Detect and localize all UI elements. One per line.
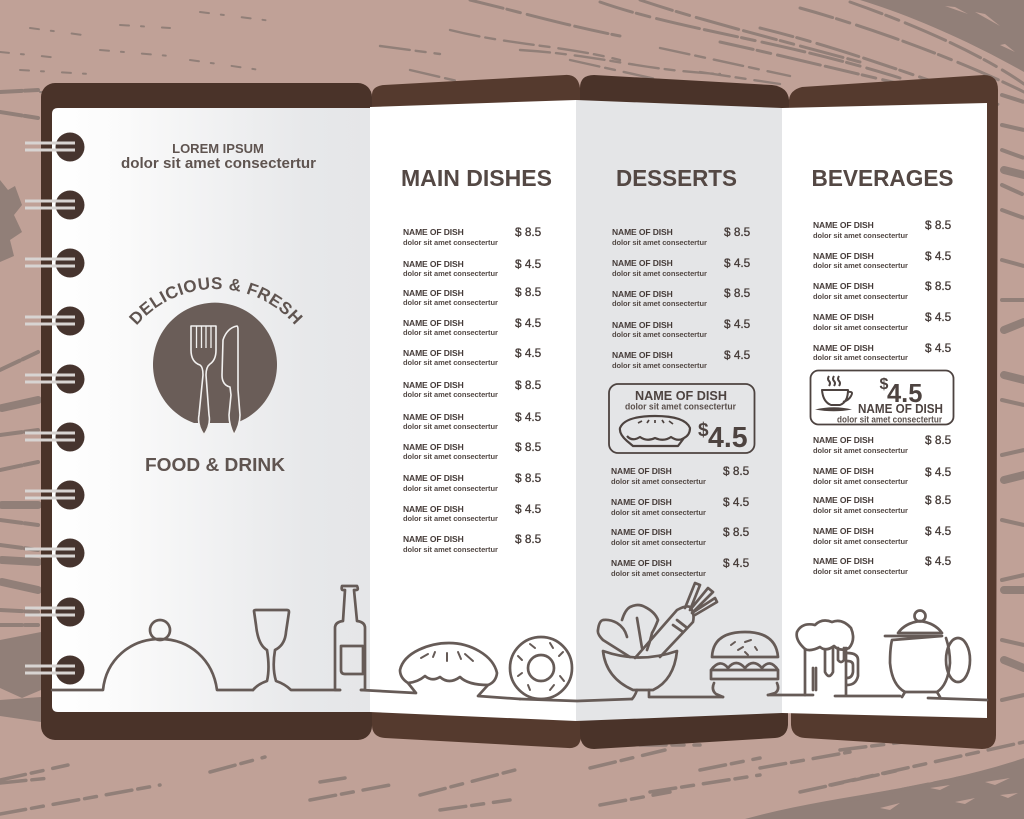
- list: main dishes: $ 4.5: [515, 410, 542, 424]
- list: main dishes: $ 4.5: [515, 502, 542, 516]
- panel 2 cover: [372, 75, 581, 748]
- list: main dishes: dolor sit amet consectertur: [403, 269, 498, 278]
- line: centre fold: [520, 699, 632, 701]
- menu pages: [52, 100, 987, 721]
- list: beverages: NAME OF DISH: [813, 251, 874, 261]
- list: main dishes: dolor sit amet consectertur: [403, 238, 498, 247]
- list: desserts: NAME OF DISH: [611, 466, 672, 476]
- callout: beverage special: NAME OF DISH: [858, 402, 943, 416]
- panel 1 cover: [41, 83, 372, 740]
- list: desserts: dolor sit amet consectertur: [612, 269, 707, 278]
- list: main dishes: NAME OF DISH: [403, 504, 464, 514]
- list: beverages: $ 8.5: [925, 433, 952, 447]
- page: main dishes: [370, 100, 576, 721]
- icon: burger: [711, 632, 813, 697]
- list: desserts: dolor sit amet consectertur: [611, 477, 706, 486]
- list: beverages: dolor sit amet consectertur: [813, 292, 908, 301]
- list: desserts: NAME OF DISH: [611, 527, 672, 537]
- icon: pie: [361, 643, 520, 699]
- icon: teapot: [885, 610, 987, 700]
- list: desserts: $ 4.5: [723, 556, 750, 570]
- spiral binding rings: [25, 132, 84, 684]
- list: beverages: dolor sit amet consectertur: [813, 537, 908, 546]
- list: desserts: NAME OF DISH: [612, 289, 673, 299]
- heading: desserts: DESSERTS: [616, 165, 737, 191]
- heading: beverages: BEVERAGES: [812, 165, 954, 191]
- list: beverages: NAME OF DISH: [813, 466, 874, 476]
- panel 4 cover: [789, 75, 998, 749]
- list: desserts: NAME OF DISH: [612, 227, 673, 237]
- list: beverages: NAME OF DISH: [813, 220, 874, 230]
- cover heading: dolor sit amet consectertur: [121, 156, 316, 172]
- list: main dishes: $ 4.5: [515, 316, 542, 330]
- list: desserts: NAME OF DISH: [612, 258, 673, 268]
- list: desserts: $ 8.5: [723, 525, 750, 539]
- page: cover page: [52, 108, 370, 712]
- list: main dishes: $ 4.5: [515, 257, 542, 271]
- list: desserts: NAME OF DISH: [612, 350, 673, 360]
- food icon skyline: [52, 583, 987, 701]
- list: main dishes: NAME OF DISH: [403, 380, 464, 390]
- list: main dishes: dolor sit amet consectertur: [403, 358, 498, 367]
- list: main dishes: dolor sit amet consectertur: [403, 514, 498, 523]
- list: main dishes: dolor sit amet consectertur: [403, 390, 498, 399]
- list: main dishes: $ 4.5: [515, 346, 542, 360]
- list: beverages: $ 8.5: [925, 218, 952, 232]
- cover heading: [121, 141, 316, 172]
- list: main dishes: NAME OF DISH: [403, 442, 464, 452]
- list: beverages: dolor sit amet consectertur: [813, 477, 908, 486]
- list: desserts: dolor sit amet consectertur: [611, 569, 706, 578]
- curved slogan: DELICIOUS & FRESH: [128, 277, 303, 325]
- list: beverages: dolor sit amet consectertur: [813, 261, 908, 270]
- list: beverages: $ 4.5: [925, 341, 952, 355]
- list: beverages: dolor sit amet consectertur: [813, 567, 908, 576]
- list: beverages: dolor sit amet consectertur: [813, 353, 908, 362]
- list: main dishes: [403, 225, 542, 554]
- list: desserts: dolor sit amet consectertur: [612, 238, 707, 247]
- list: beverages: NAME OF DISH: [813, 495, 874, 505]
- list: desserts: $ 4.5: [723, 495, 750, 509]
- list: desserts: $ 8.5: [723, 464, 750, 478]
- list: beverages: dolor sit amet consectertur: [813, 323, 908, 332]
- callout: dessert special: [609, 384, 754, 454]
- list: beverages: dolor sit amet consectertur: [813, 506, 908, 515]
- callout: beverage special: [810, 370, 954, 424]
- list: desserts: dolor sit amet consectertur: [612, 330, 707, 339]
- icon: wine glass: [253, 610, 340, 690]
- list: desserts: dolor sit amet consectertur: [611, 538, 706, 547]
- icon: salad bowl with carrot: [598, 583, 723, 699]
- list: desserts: $ 8.5: [724, 225, 751, 239]
- callout: beverage special: dolor sit amet consectertur: [837, 414, 942, 424]
- callout: dessert special: dolor sit amet consectertur: [625, 402, 736, 412]
- icon: donut: [510, 637, 572, 699]
- menu folder covers: [41, 75, 998, 749]
- list: beverages: NAME OF DISH: [813, 526, 874, 536]
- list: main dishes: $ 8.5: [515, 471, 542, 485]
- list: desserts: $ 8.5: [724, 286, 751, 300]
- icon: beer mug: [797, 621, 900, 696]
- icon: knife: [222, 326, 240, 435]
- list: desserts: $ 4.5: [724, 317, 751, 331]
- callout: dessert special: NAME OF DISH: [635, 389, 727, 403]
- food and drink label: FOOD & DRINK: [145, 454, 286, 475]
- list: beverages: dolor sit amet consectertur: [813, 231, 908, 240]
- list: main dishes: $ 8.5: [515, 378, 542, 392]
- list: main dishes: NAME OF DISH: [403, 288, 464, 298]
- list: main dishes: dolor sit amet consectertur: [403, 422, 498, 431]
- list: main dishes: $ 8.5: [515, 440, 542, 454]
- cover heading: LOREM IPSUM: [172, 141, 264, 156]
- list: main dishes: $ 8.5: [515, 225, 542, 239]
- list: beverages: [813, 218, 952, 576]
- list: desserts: $ 4.5: [724, 256, 751, 270]
- list: beverages: $ 4.5: [925, 554, 952, 568]
- list: beverages: NAME OF DISH: [813, 343, 874, 353]
- list: desserts: $ 4.5: [724, 348, 751, 362]
- page: desserts: [576, 100, 782, 721]
- icon: fork: [191, 326, 216, 435]
- list: main dishes: dolor sit amet consectertur: [403, 452, 498, 461]
- list: desserts: NAME OF DISH: [611, 558, 672, 568]
- list: desserts: dolor sit amet consectertur: [612, 361, 707, 370]
- list: beverages: dolor sit amet consectertur: [813, 446, 908, 455]
- list: main dishes: NAME OF DISH: [403, 348, 464, 358]
- heading: main dishes: MAIN DISHES: [401, 165, 552, 191]
- list: main dishes: NAME OF DISH: [403, 318, 464, 328]
- list: beverages: $ 4.5: [925, 524, 952, 538]
- list: main dishes: dolor sit amet consectertur: [403, 328, 498, 337]
- icon: coffee cup: [822, 376, 852, 405]
- list: main dishes: NAME OF DISH: [403, 473, 464, 483]
- list: beverages: NAME OF DISH: [813, 435, 874, 445]
- list: beverages: $ 8.5: [925, 493, 952, 507]
- list: beverages: NAME OF DISH: [813, 556, 874, 566]
- list: main dishes: dolor sit amet consectertur: [403, 545, 498, 554]
- list: beverages: $ 4.5: [925, 310, 952, 324]
- list: desserts: [611, 225, 751, 578]
- list: desserts: NAME OF DISH: [612, 320, 673, 330]
- list: main dishes: $ 8.5: [515, 285, 542, 299]
- page: beverages: [782, 103, 987, 718]
- list: beverages: $ 4.5: [925, 465, 952, 479]
- list: beverages: NAME OF DISH: [813, 312, 874, 322]
- callout: dessert special: $: [698, 420, 709, 441]
- panel 3 cover: [580, 75, 789, 749]
- icon: pie: [620, 416, 690, 446]
- icon: cloche: [52, 620, 253, 690]
- list: main dishes: dolor sit amet consectertur: [403, 484, 498, 493]
- list: main dishes: NAME OF DISH: [403, 534, 464, 544]
- callout: beverage special: $: [880, 376, 888, 393]
- list: beverages: NAME OF DISH: [813, 281, 874, 291]
- icon: bottle: [335, 586, 365, 690]
- logo: plate fork and knife: [153, 303, 277, 435]
- list: main dishes: NAME OF DISH: [403, 259, 464, 269]
- list: desserts: dolor sit amet consectertur: [611, 508, 706, 517]
- list: main dishes: NAME OF DISH: [403, 412, 464, 422]
- list: desserts: NAME OF DISH: [611, 497, 672, 507]
- list: main dishes: dolor sit amet consectertur: [403, 298, 498, 307]
- list: beverages: $ 8.5: [925, 279, 952, 293]
- list: main dishes: $ 8.5: [515, 532, 542, 546]
- callout: beverage special: 4.5: [887, 380, 922, 408]
- list: main dishes: NAME OF DISH: [403, 227, 464, 237]
- list: beverages: $ 4.5: [925, 249, 952, 263]
- list: desserts: dolor sit amet consectertur: [612, 299, 707, 308]
- callout: dessert special: 4.5: [708, 422, 748, 454]
